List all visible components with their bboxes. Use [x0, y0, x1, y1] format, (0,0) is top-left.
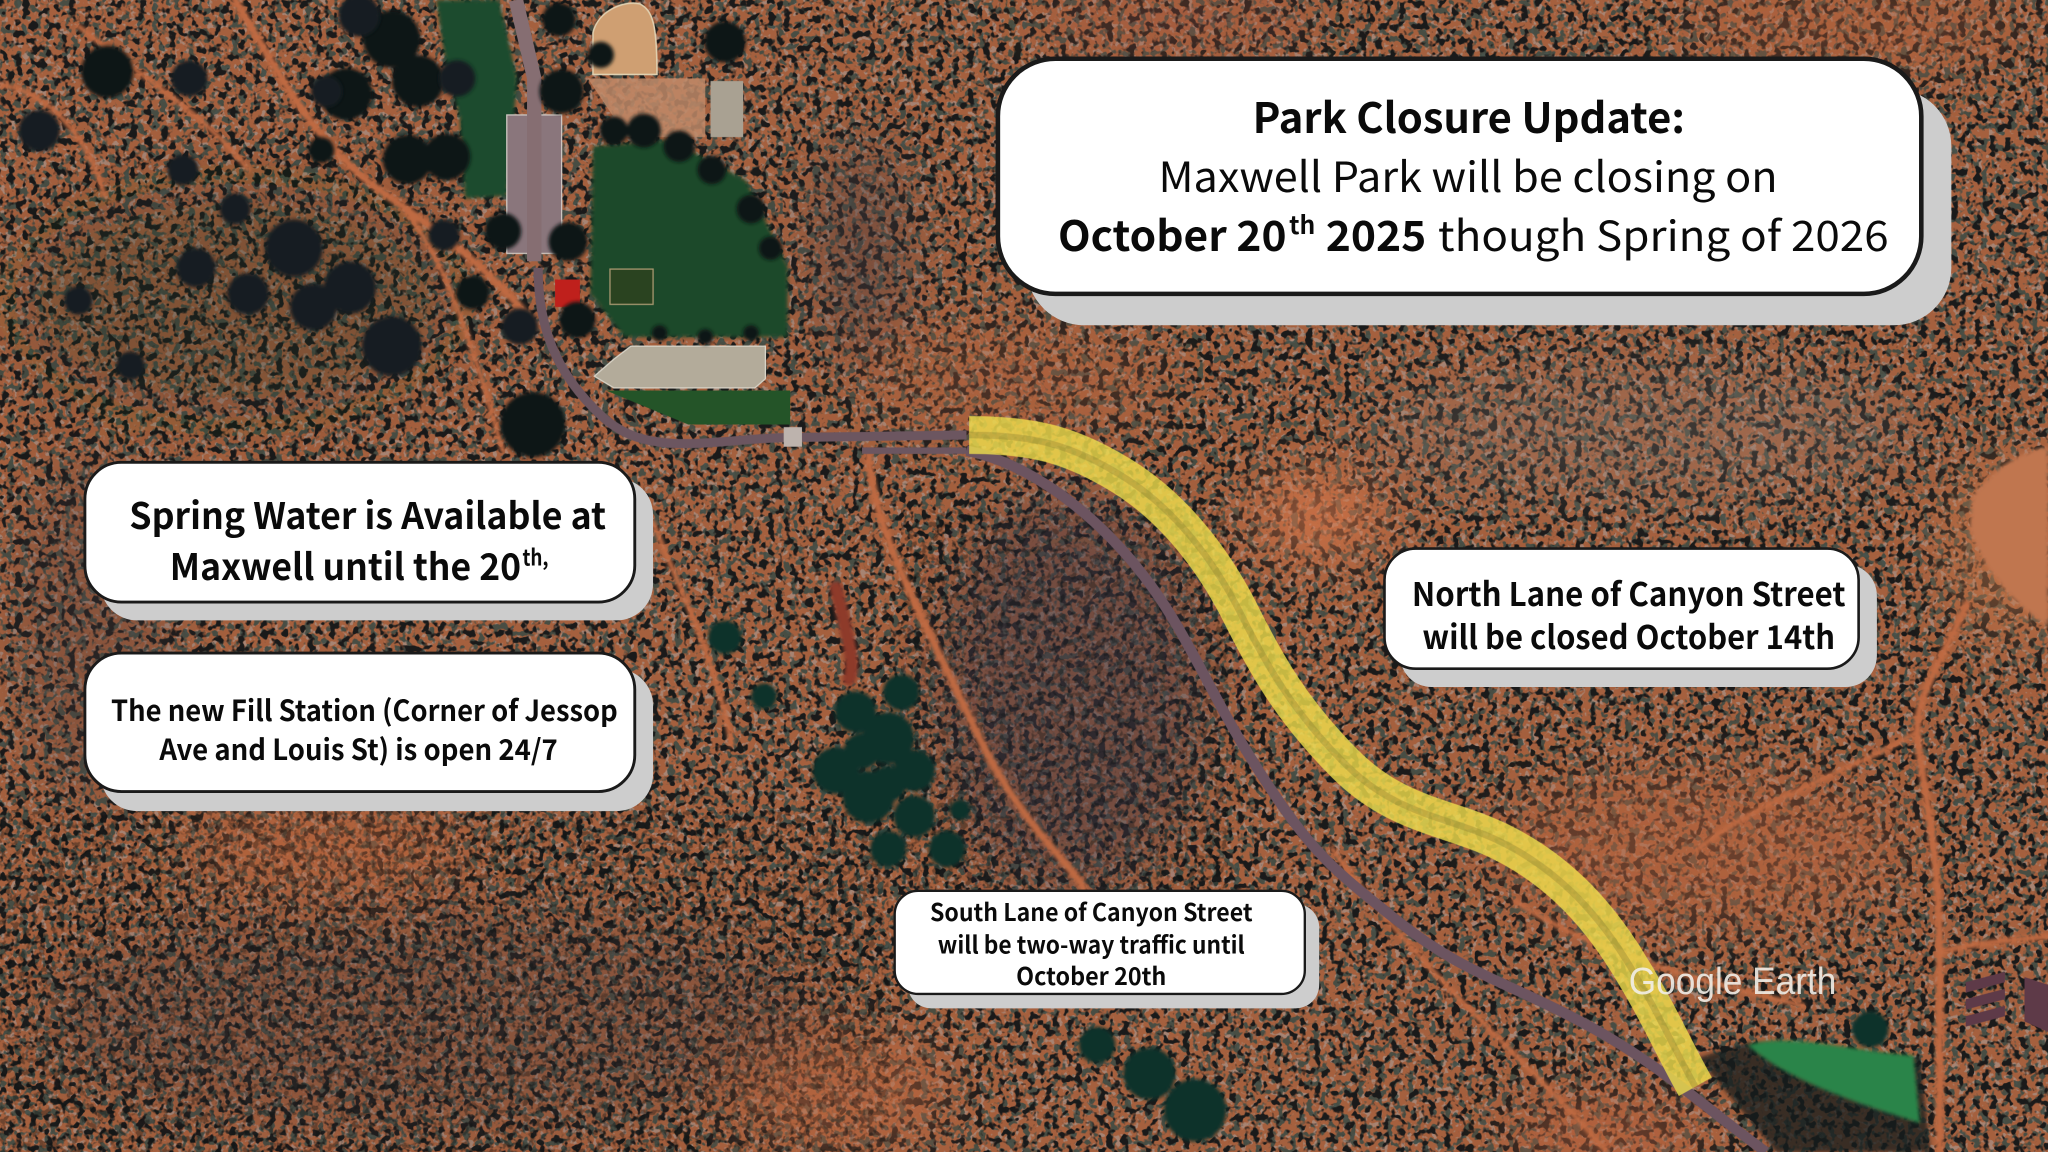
park: red building	[555, 280, 580, 307]
park: pale lot	[711, 81, 743, 137]
text: south lane line one: South Lane of Canyon Street	[930, 893, 1253, 928]
park: lower lawn	[606, 391, 790, 424]
text: spring water line two: Maxwell until the 20	[170, 538, 521, 591]
dark hedge along south road	[1698, 1042, 1930, 1152]
text: closing line: Maxwell Park will be closing on	[1159, 145, 1778, 205]
pond	[1748, 1040, 1920, 1123]
text: date line: October 20	[1058, 204, 1287, 264]
text: date line	[1058, 204, 1889, 264]
park: sand lots	[588, 78, 705, 137]
text: date line: 2025	[1326, 204, 1426, 264]
text: south lane line three: October 20th	[1016, 957, 1166, 992]
text: date line: though Spring of 2026	[1438, 204, 1889, 264]
Google Earth watermark: Google Earth	[1629, 961, 1836, 1003]
text: spring water line one: Spring Water is Available at	[129, 487, 606, 540]
purple rows	[1966, 972, 2048, 1032]
callout: south lane	[895, 891, 1319, 1008]
text: north lane line one: North Lane of Canyon Street	[1412, 569, 1846, 616]
park: amphitheater	[593, 3, 657, 74]
park: lower lot	[594, 346, 765, 388]
park: grass strip	[436, 0, 517, 199]
text: fill station line two: Ave and Louis St) is open 24/7	[158, 728, 558, 769]
dense tree speckle on the west side	[0, 509, 1228, 1152]
text: fill station line one: The new Fill Station (Corner of Jessop	[111, 689, 618, 730]
south road	[538, 268, 1766, 1152]
dark trees	[81, 3, 782, 457]
road crosswalk	[784, 427, 802, 447]
orange clearing east	[1970, 447, 2048, 627]
park: north road	[516, 0, 534, 261]
park: infield	[610, 269, 653, 304]
text: spring water line two: th,	[522, 541, 549, 573]
callout: fill station	[85, 653, 653, 811]
park: parking lot	[507, 115, 562, 253]
callout: north lane	[1384, 549, 1877, 687]
callout: park closure update	[998, 59, 1951, 325]
text: south lane line two: will be two-way traffic until	[938, 925, 1245, 960]
dark green tree clump	[708, 620, 1889, 1142]
text: date line: th	[1289, 206, 1315, 242]
heading: park closure update: Park Closure Update:	[1253, 86, 1685, 146]
callout: spring water	[85, 462, 653, 620]
text: north lane line two: will be closed October 14th	[1422, 612, 1835, 659]
park: ball field	[590, 140, 788, 337]
highlighted closed road section	[969, 435, 1695, 1087]
